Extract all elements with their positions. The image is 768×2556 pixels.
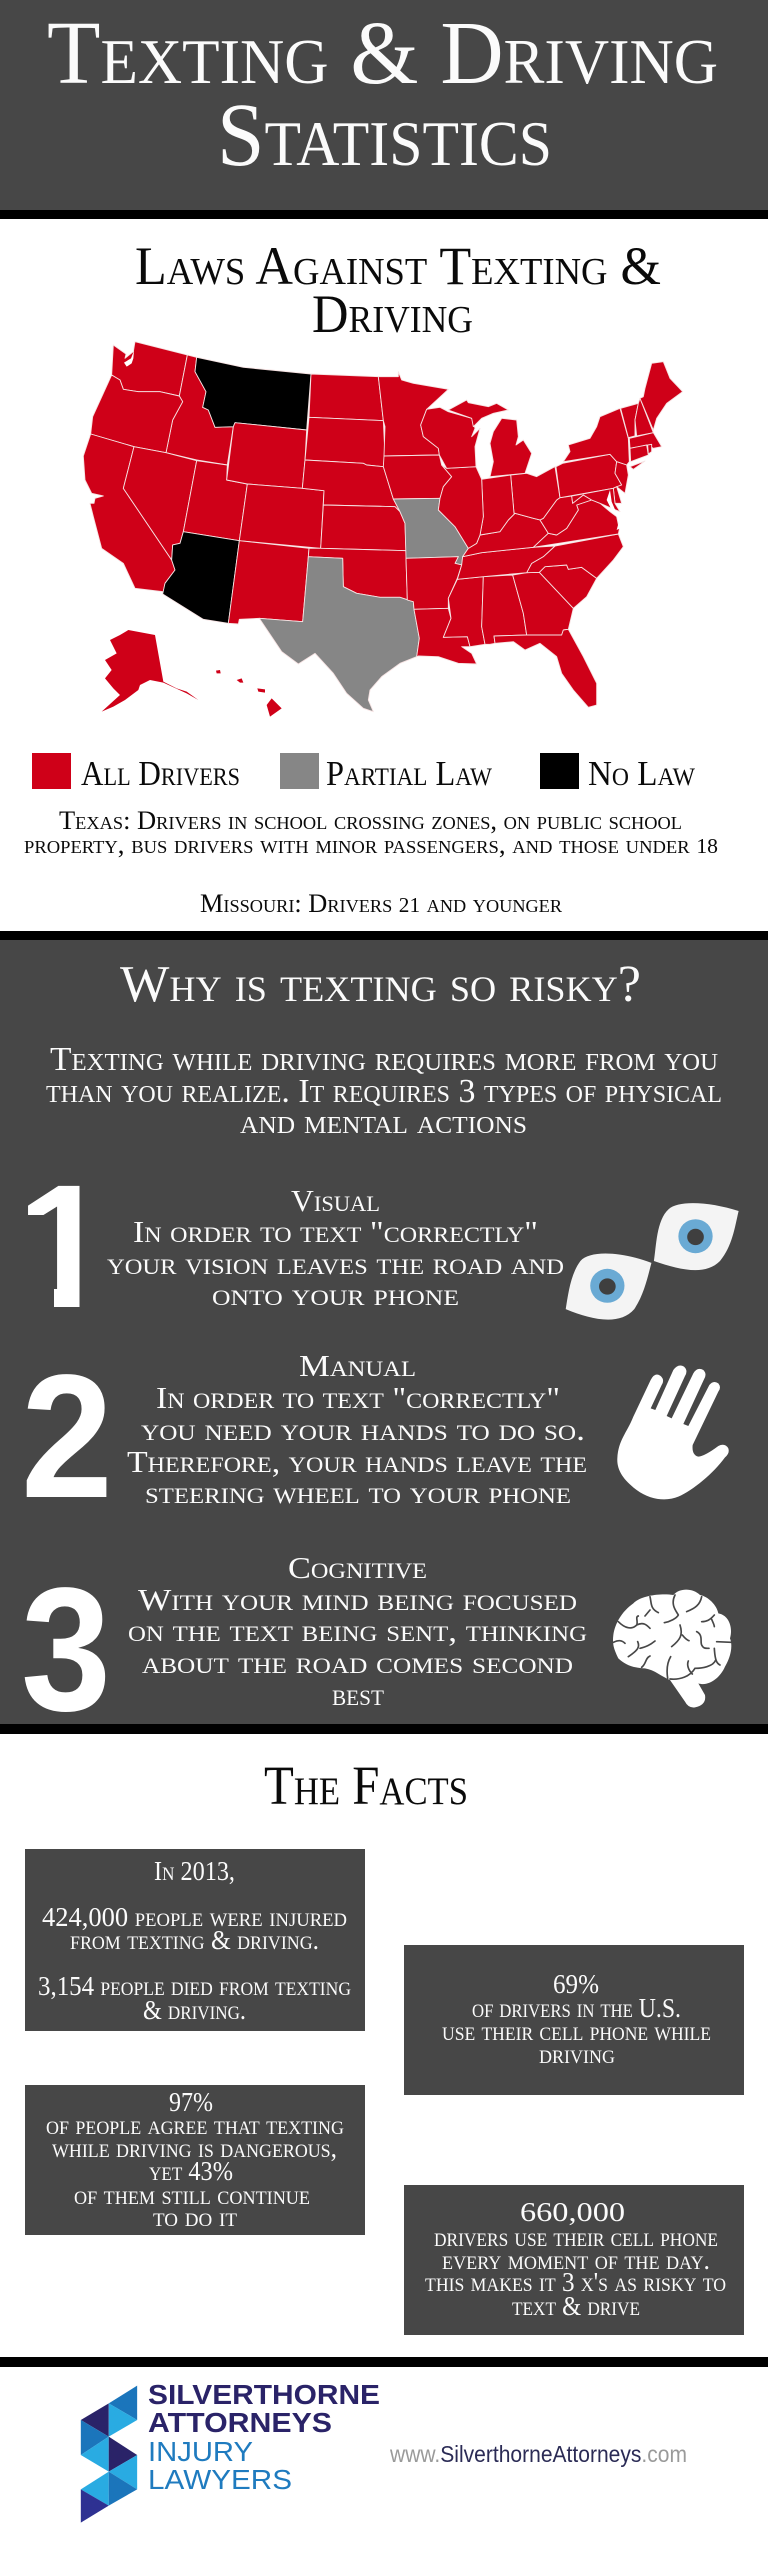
text: manual: you need your hands to do so.	[141, 1412, 585, 1447]
icon: brain	[613, 1590, 731, 1707]
panel: why is texting so risky	[0, 931, 768, 1748]
intro text: than you realize. It requires 3 types of physical	[46, 1073, 722, 1110]
text: manual: In order to text "correctly"	[156, 1380, 560, 1415]
fact box: 2013 injuries and deaths: 3,154 people died from texting	[38, 1971, 351, 2001]
legend: All Drivers	[81, 754, 240, 793]
title: Statistics	[217, 86, 552, 185]
fact box: 660,000 drivers: every moment of the day.	[442, 2245, 710, 2275]
note: partial law details: Texas: Drivers in school crossing zones, on public school	[59, 806, 682, 835]
legend: Partial Law	[326, 754, 492, 793]
fact box: 69 percent	[404, 1945, 744, 2095]
text: manual: steering wheel to your phone	[145, 1475, 571, 1510]
text: cognitive: With your mind being focused	[138, 1582, 577, 1617]
note: partial law details	[24, 806, 718, 918]
text: cognitive	[128, 1550, 587, 1712]
fact box: 2013 injuries and deaths	[25, 1849, 365, 2031]
logo wordmark: LAWYERS	[148, 2464, 292, 2495]
intro text: Texting while driving requires more from you	[50, 1041, 718, 1078]
heading: laws: Laws Against Texting &	[135, 236, 661, 296]
text: cognitive: about the road comes second	[142, 1645, 573, 1680]
panel: the facts	[25, 1755, 744, 2335]
text: cognitive: Cognitive	[288, 1550, 427, 1585]
text: visual: Visual	[291, 1183, 380, 1218]
text: visual: onto your phone	[212, 1277, 459, 1312]
logo mark	[81, 2386, 137, 2523]
number 2: 2	[21, 1339, 113, 1535]
intro text	[46, 1041, 722, 1141]
number 1: 1	[16, 1149, 114, 1345]
text: cognitive: best	[332, 1677, 385, 1712]
heading: laws	[135, 236, 661, 344]
fact box: 69 percent: use their cell phone while	[442, 2016, 711, 2046]
heading: why risky: Why is texting so risky?	[120, 956, 641, 1013]
fact box: 97 percent	[25, 2085, 365, 2235]
number 3: 3	[21, 1552, 111, 1748]
text: manual: Manual	[299, 1348, 416, 1383]
fact box: 2013 injuries and deaths: from texting & driving.	[70, 1925, 319, 1955]
fact box: 660,000 drivers: 660,000	[520, 2197, 625, 2227]
logo wordmark	[148, 2379, 380, 2495]
fact box: 660,000 drivers: this makes it 3 x's as risky to	[425, 2267, 726, 2297]
fact box: 660,000 drivers: drivers use their cell phone	[434, 2222, 718, 2252]
fact box: 97 percent: of them still continue	[74, 2180, 310, 2210]
heading: laws: Driving	[312, 284, 473, 344]
title	[47, 4, 718, 185]
legend	[32, 753, 695, 793]
icon: eyes	[566, 1203, 739, 1320]
text: visual: your vision leaves the road and	[107, 1246, 564, 1281]
fact box: 69 percent: driving	[539, 2039, 615, 2069]
icon: hand	[617, 1366, 729, 1499]
note: partial law details: Missouri: Drivers 21 and younger	[200, 889, 562, 918]
fact box: 660,000 drivers: text & drive	[512, 2291, 640, 2321]
fact box: 97 percent: of people agree that texting	[46, 2110, 344, 2140]
heading: the facts: The Facts	[264, 1755, 468, 1816]
logo wordmark: ATTORNEYS	[148, 2407, 332, 2438]
fact box: 69 percent: 69%	[553, 1969, 599, 1999]
text: manual: Therefore, your hands leave the	[127, 1444, 587, 1479]
panel: title header	[0, 0, 768, 219]
text: manual	[127, 1348, 587, 1510]
logo wordmark: INJURY	[148, 2436, 253, 2467]
fact box: 2013 injuries and deaths: In 2013,	[154, 1856, 235, 1886]
fact box: 69 percent: of drivers in the U.S.	[472, 1993, 681, 2023]
fact box: 97 percent: while driving is dangerous,	[52, 2133, 337, 2163]
map: US states by law type	[83, 342, 683, 717]
website url: www.SilverthorneAttorneys.com	[389, 2441, 687, 2467]
text: visual: In order to text "correctly"	[133, 1214, 538, 1249]
fact box: 660,000 drivers	[404, 2185, 744, 2335]
title: Texting & Driving	[47, 4, 718, 103]
intro text: and mental actions	[240, 1104, 527, 1141]
fact box: 97 percent: yet 43%	[149, 2156, 233, 2186]
fact box: 97 percent: 97%	[169, 2087, 213, 2117]
text: cognitive: on the text being sent, thinking	[128, 1613, 587, 1648]
fact box: 2013 injuries and deaths: 424,000 people were injured	[42, 1902, 347, 1932]
fact box: 2013 injuries and deaths: & driving.	[143, 1995, 246, 2025]
panel: laws against texting and driving	[24, 236, 718, 918]
logo wordmark: SILVERTHORNE	[148, 2379, 380, 2410]
note: partial law details: property, bus drivers with minor passengers, and those under 18	[24, 830, 718, 859]
panel: footer	[0, 2357, 768, 2523]
legend: No Law	[588, 754, 695, 793]
text: visual	[107, 1183, 564, 1312]
fact box: 97 percent: to do it	[153, 2202, 237, 2232]
